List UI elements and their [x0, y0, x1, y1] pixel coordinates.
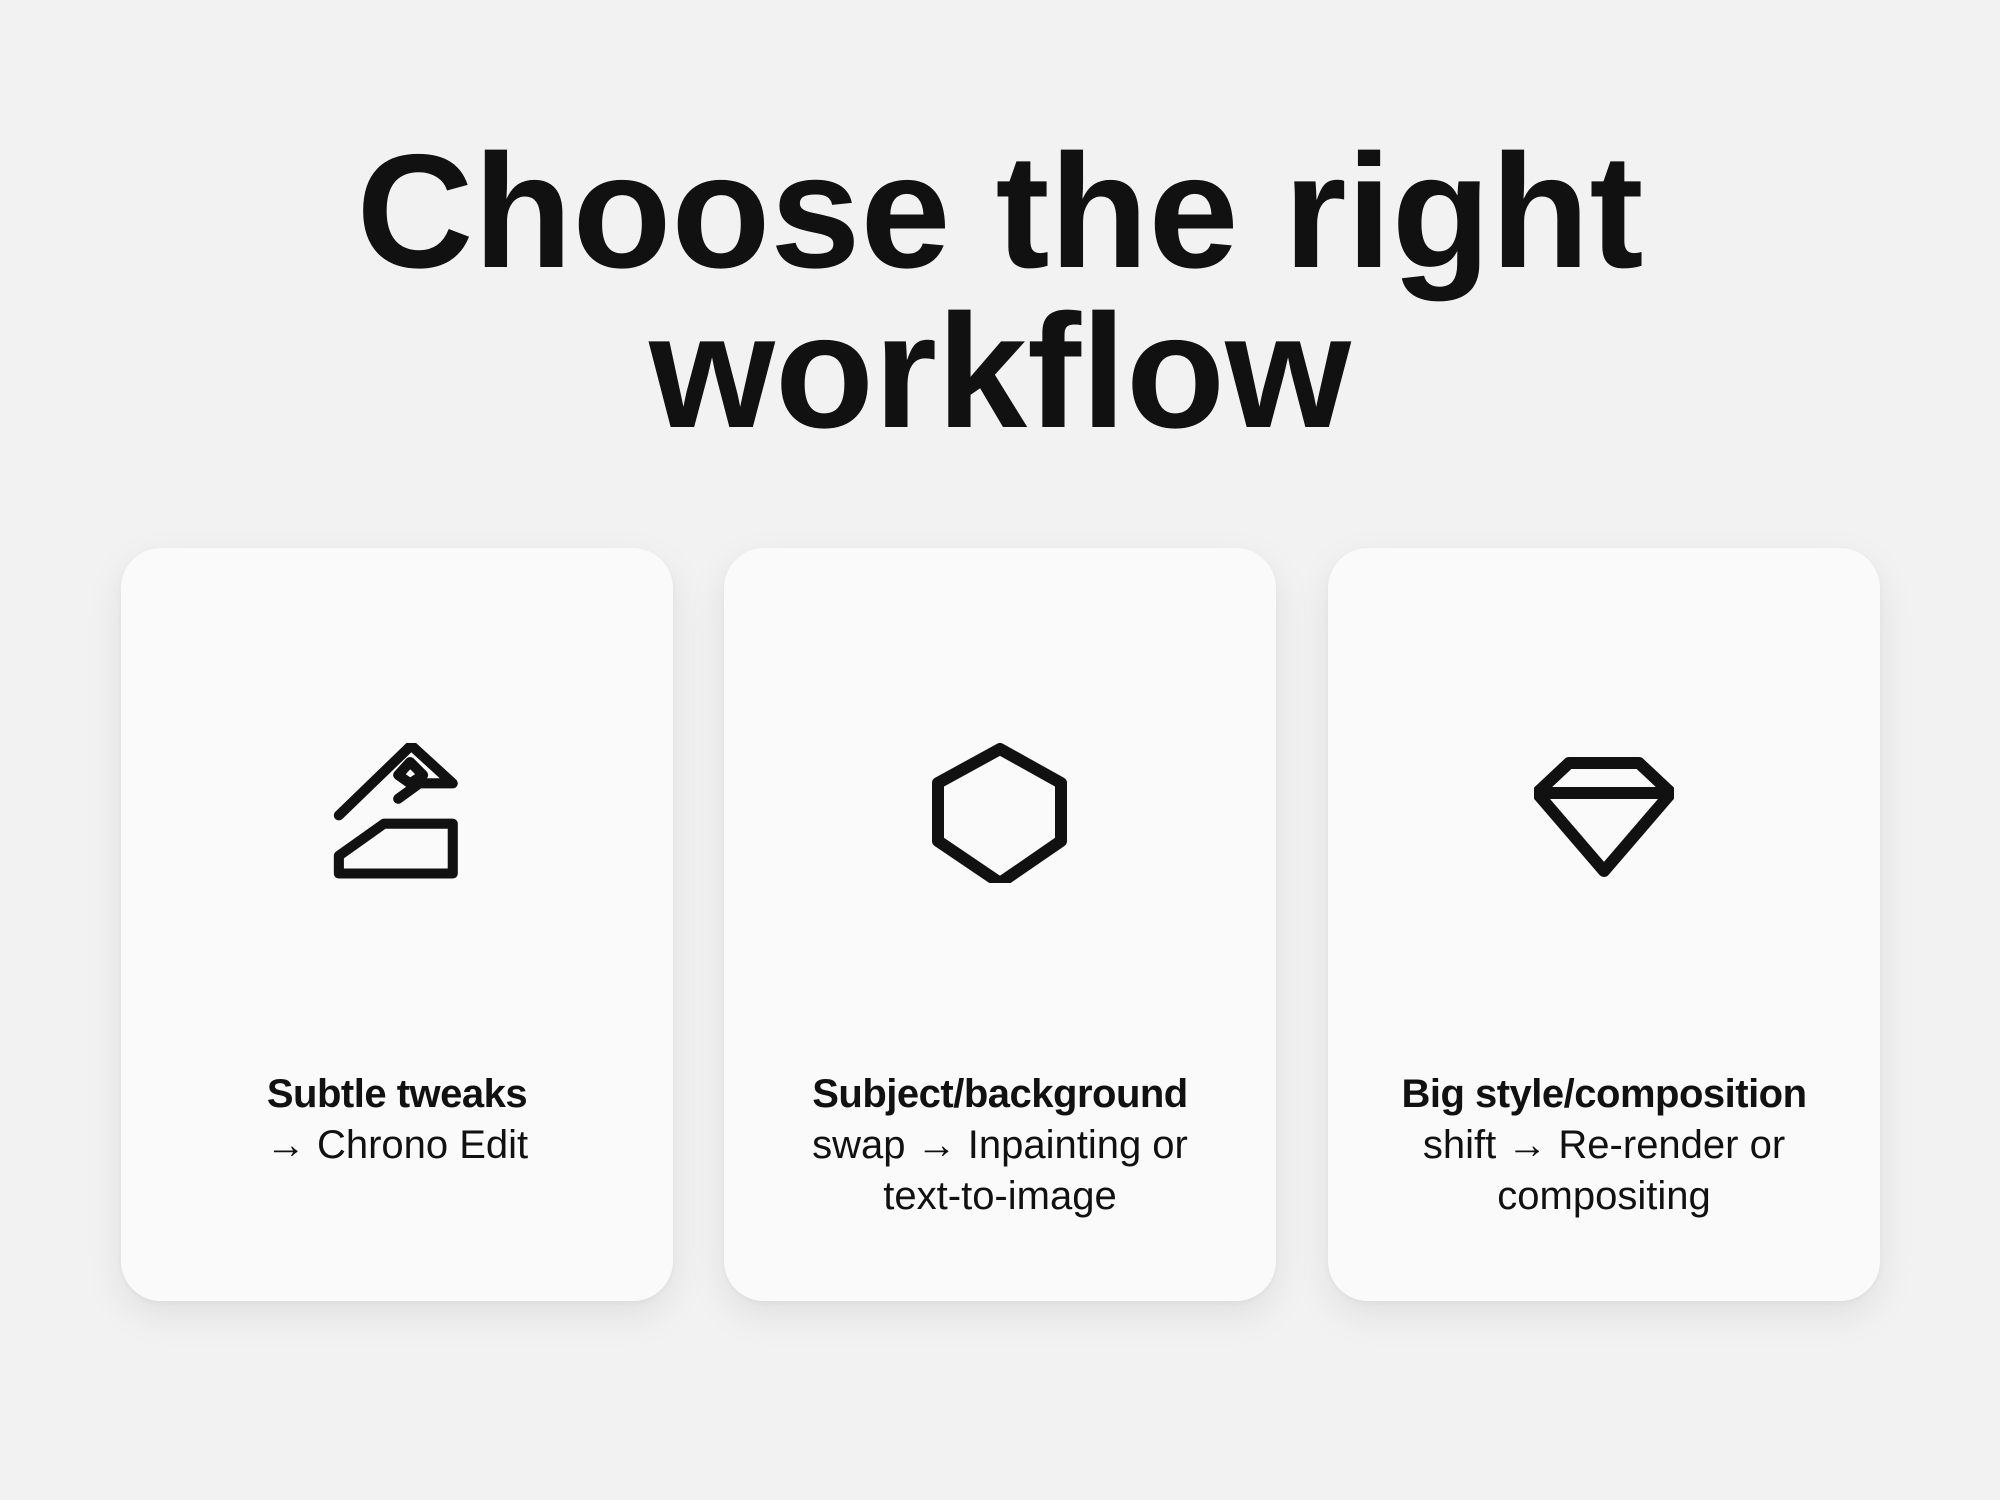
text: subtle tweaks	[266, 1072, 528, 1167]
panel: subject/background swap	[724, 548, 1276, 1301]
text: big style: Big style/composition	[1401, 1072, 1807, 1116]
title: Choose the right	[356, 121, 1643, 302]
text: subtle tweaks: → Chrono Edit	[266, 1123, 528, 1167]
text: subtle tweaks: Subtle tweaks	[267, 1072, 527, 1116]
text: big style: shift → Re-render or	[1423, 1123, 1785, 1167]
title: workflow	[649, 281, 1351, 462]
panel: subtle tweaks	[121, 548, 673, 1301]
icon: hexagon	[932, 743, 1067, 883]
text: big style	[1401, 1072, 1807, 1218]
text: subject/background: swap → Inpainting or	[812, 1123, 1188, 1167]
text: subject/background: Subject/background	[812, 1072, 1188, 1116]
text: subject/background: text-to-image	[883, 1174, 1117, 1218]
icon: edit shape	[334, 743, 458, 878]
icon: diamond	[1534, 757, 1674, 877]
panel: big style shift	[1328, 548, 1880, 1301]
text: big style: compositing	[1497, 1174, 1711, 1218]
title	[356, 121, 1643, 462]
text: subject/background	[812, 1072, 1188, 1218]
